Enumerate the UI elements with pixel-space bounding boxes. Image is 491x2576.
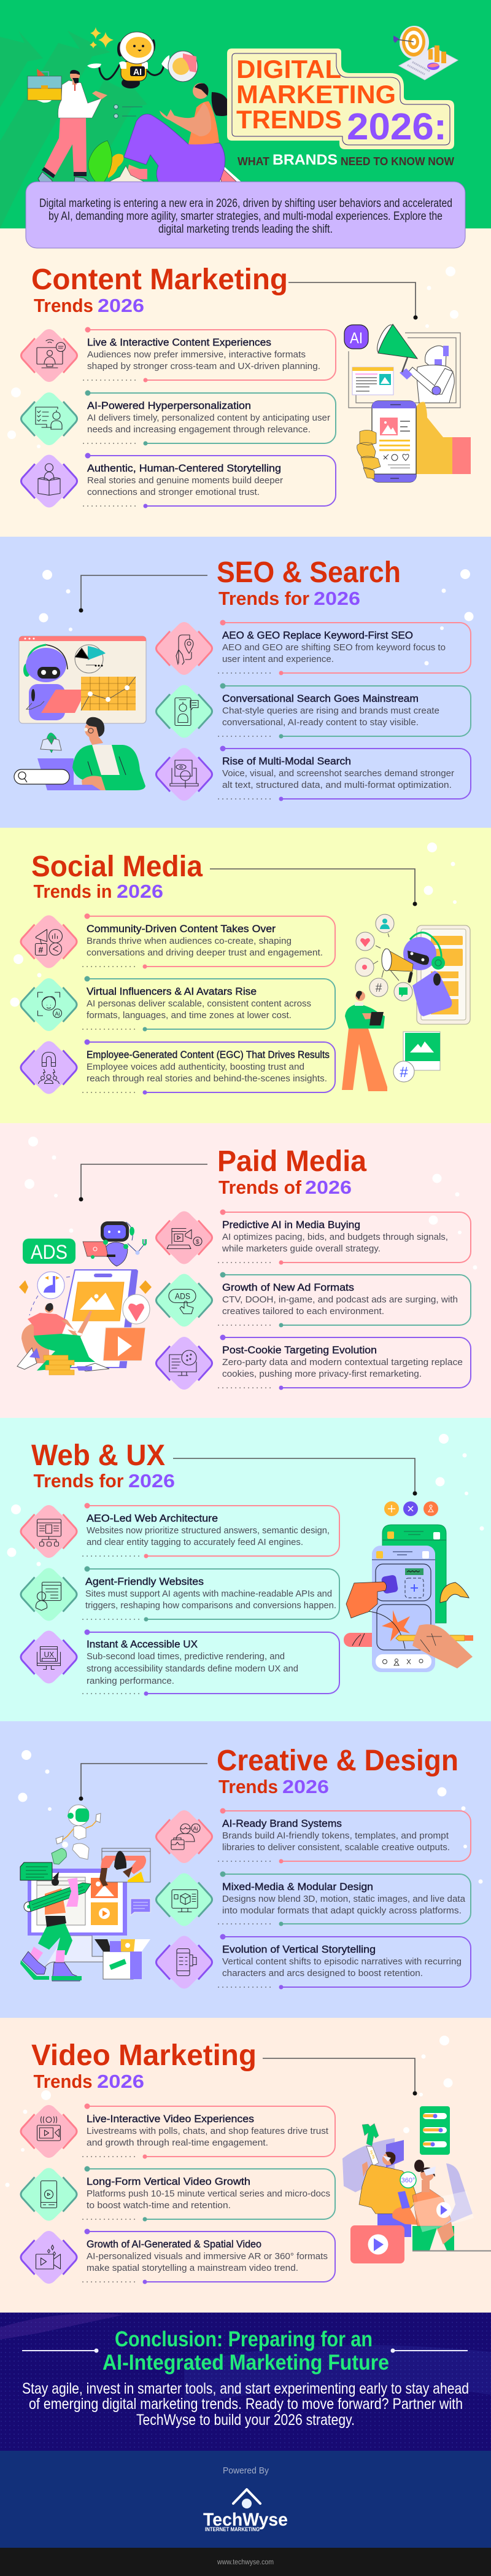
card 3: Evolution of Vertical Storytelling [222, 1944, 376, 1955]
card 3: Real stories and genuine moments build deeper [87, 476, 283, 486]
icon: laptop ad [156, 1211, 212, 1264]
panel: powered by [0, 2451, 491, 2548]
icon: AI avatar: Ai [55, 1011, 60, 1017]
card 1: Websites now prioritize structured answers, semantic design, [87, 1526, 330, 1536]
card 1: AEO & GEO Replace Keyword-First SEO [222, 630, 413, 641]
card 3: connections and stronger emotional trust. [87, 488, 260, 497]
conclusion body: TechWyse to build your 2026 strategy. [136, 2411, 355, 2429]
illustration: robot analytics and man [14, 636, 146, 790]
connector [288, 282, 417, 319]
panel: Video Marketing [0, 2018, 491, 2313]
connector [210, 869, 417, 906]
card 2: Designs now blend 3D, motion, static images, and live data [222, 1894, 466, 1904]
subtitle: BRANDS [273, 152, 338, 168]
figure: seated woman [101, 83, 247, 187]
card 1 [218, 1808, 471, 1863]
divider lines [22, 2348, 468, 2353]
icon: sparkles [90, 27, 114, 49]
illustration: VR shoppers: $ [370, 2150, 373, 2155]
connector [79, 575, 207, 613]
icon: laptop ad: $ [196, 1239, 199, 1245]
panel: hero header [0, 0, 491, 228]
card 1: user intent and experience. [222, 655, 334, 664]
card 2: AI personas deliver scalable, consistent content across [87, 999, 311, 1009]
panel: Content Marketing [0, 182, 491, 537]
card 3 [83, 2229, 335, 2284]
icon: UX screen [21, 1631, 77, 1684]
intro text box: digital marketing trends leading the shift. [158, 223, 333, 236]
subheading: 2026 [98, 295, 144, 316]
card 1: Audiences now prefer immersive, interactive formats [87, 350, 306, 360]
icon: AI robot: AI [133, 67, 142, 77]
background dots [10, 842, 457, 1007]
subheading: Trends in [33, 881, 112, 902]
card 1 [218, 1210, 471, 1265]
card 3: cookies, pushing more privacy-first remarketing. [222, 1369, 422, 1379]
card 2: triggers, reshaping how comparisons and conversions happen. [85, 1601, 336, 1611]
subheading: Trends for [218, 588, 309, 609]
subheading [33, 1470, 175, 1492]
heading: Social Media [31, 850, 203, 883]
icon: cookie monitor [156, 1337, 212, 1390]
card 2: Platforms push 10-15 minute vertical series and micro-docs [87, 2189, 330, 2199]
icon: live video camera [21, 2105, 77, 2158]
illustration: VR shoppers: $ [372, 2154, 375, 2160]
panel: Paid Media [0, 1123, 491, 1418]
card 3: ranking performance. [87, 1676, 174, 1686]
icon: community bubbles [21, 915, 77, 968]
connector [173, 1458, 417, 1496]
subheading [34, 295, 144, 316]
card 2: conversational, AI-ready content to stay visible. [222, 718, 419, 728]
card 3: Growth of AI-Generated & Spatial Video [87, 2239, 261, 2250]
card 3 [218, 1335, 471, 1390]
card 2 [83, 2166, 335, 2222]
title banner: TRENDS [236, 105, 342, 134]
subtitle [238, 152, 454, 168]
icon: UX screen: UX [44, 1651, 54, 1659]
card 1: Community-Driven Content Takes Over [87, 924, 276, 935]
background dots [25, 1137, 477, 1270]
subheading: Trends for [33, 1470, 124, 1492]
powered by label: Powered By [223, 2465, 269, 2476]
subheading: 2026 [282, 1776, 329, 1797]
subheading: Trends [34, 295, 93, 316]
card 2 [218, 1872, 471, 1926]
logo: TechWyse [203, 2489, 288, 2532]
card 1: libraries to deliver consistent, scalable creative outputs. [222, 1843, 450, 1853]
heading: SEO & Search [217, 556, 401, 589]
icon: agent website [21, 1568, 77, 1621]
card 1: AI-Ready Brand Systems [222, 1818, 342, 1829]
icon: AI video camera [21, 2231, 77, 2284]
illustration: robot with megaphone and phone: AI [350, 330, 363, 347]
illustration: ads robot and phone [17, 1221, 152, 1375]
card 1 [83, 2104, 335, 2159]
conclusion heading: AI-Integrated Marketing Future [102, 2351, 389, 2375]
panel: Web & UX [0, 1418, 491, 1721]
icon: ADS click: ADS [175, 1291, 190, 1301]
title banner [227, 49, 454, 149]
card 2: CTV, DOOH, in-game, and podcast ads are surging, with [222, 1295, 458, 1305]
logo: TechWyse: TechWyse [203, 2510, 288, 2530]
card 1: AEO-Led Web Architecture [87, 1513, 218, 1524]
card 3 [218, 1934, 471, 1990]
icon: AI brand person [156, 1810, 212, 1863]
figure: man with briefcase [28, 69, 107, 187]
card 1: AEO and GEO are shifting SEO from keyword focus to [222, 643, 446, 653]
card 3: Instant & Accessible UX [87, 1639, 198, 1650]
card 3: Voice, visual, and screenshot searches demand stronger [222, 769, 454, 779]
subheading: 2026 [314, 588, 360, 609]
card 3 [83, 1630, 339, 1696]
subheading: Trends [218, 1776, 278, 1797]
icon: live monitor [21, 329, 77, 382]
panel: Creative & Design [0, 1721, 491, 2018]
subtitle: NEED TO KNOW NOW [341, 155, 454, 168]
heading: Video Marketing [31, 2039, 257, 2072]
card 2: Conversational Search Goes Mainstream [222, 693, 419, 704]
title banner: MARKETING [236, 80, 396, 109]
card 1: AI optimizes pacing, bids, and budgets through signals, [222, 1232, 448, 1242]
card 2: Agent-Friendly Websites [85, 1576, 204, 1587]
subheading [33, 2071, 144, 2092]
illustration: VR shoppers: 360° [401, 2177, 415, 2184]
heading: Web & UX [31, 1439, 165, 1472]
card 3: Post-Cookie Targeting Evolution [222, 1345, 377, 1356]
icon: AI checklist [21, 392, 77, 445]
icon: 3D design monitor [156, 1873, 212, 1926]
card 2: Chat-style queries are rising and brands must create [222, 706, 439, 716]
card 3 [218, 745, 471, 801]
card 2 [83, 976, 335, 1032]
subheading: 2026 [305, 1177, 352, 1198]
subheading: 2026 [128, 1470, 175, 1492]
conclusion heading [102, 2327, 389, 2375]
card 1: Brands build AI-friendly tokens, templates, and prompt [222, 1831, 449, 1841]
illustration: robot megaphone and social icons [342, 914, 470, 1091]
card 3: alt text, structured data, and multi-format optimization. [222, 780, 452, 790]
subheading: Trends [33, 2071, 92, 2092]
conclusion heading: Conclusion: Preparing for an [115, 2327, 373, 2351]
card 3: strong accessibility standards define modern UX and [87, 1664, 298, 1674]
subheading: 2026 [97, 2071, 144, 2092]
icon: AI robot [87, 32, 198, 88]
background dots [5, 2036, 453, 2187]
background dots [7, 1434, 484, 1566]
card 2 [83, 391, 336, 446]
card 2: to boost watch-time and retention. [87, 2201, 231, 2211]
icon: visual search [156, 748, 212, 801]
card 2: needs and increasing engagement through relevance. [87, 425, 311, 435]
card 1: Live & Interactive Content Experiences [87, 337, 271, 348]
subtitle: WHAT [238, 155, 269, 168]
icon: storyteller with book [21, 454, 77, 507]
title banner: 2026: [347, 106, 447, 147]
icon: phone location [156, 622, 212, 675]
card 1: Predictive AI in Media Buying [222, 1220, 360, 1231]
card 1: Livestreams with polls, chats, and shop features drive trust [87, 2127, 328, 2136]
icon: community bubbles: # [38, 944, 43, 954]
card 2: formats, languages, and time zones at lower cost. [87, 1011, 292, 1021]
card 3 [83, 1039, 335, 1094]
card 2: Mixed-Media & Modular Design [222, 1881, 373, 1893]
heading: Content Marketing [31, 263, 288, 296]
illustration: app design phones [344, 1501, 473, 1672]
background dots [39, 569, 474, 666]
subheading: Trends of [218, 1177, 302, 1198]
card 1: shaped by stronger cross-team and UX-driven planning. [87, 362, 320, 372]
illustration: robot megaphone and social icons: # [376, 982, 382, 995]
card 1: conversations and driving deeper trust and engagement. [87, 948, 323, 958]
card 3: Authentic, Human-Centered Storytelling [87, 463, 281, 474]
card 2: Virtual Influencers & AI Avatars Rise [87, 986, 257, 997]
card 1: and growth through real-time engagement. [87, 2138, 268, 2148]
conclusion body [22, 2380, 469, 2429]
icon: speed dots [114, 104, 142, 118]
illustration: ads robot and phone: ADS [31, 1241, 68, 1263]
card 3: make spatial storytelling a mainstream video trend. [87, 2263, 298, 2273]
card 2 [218, 683, 471, 738]
card 3: Sub-second load times, predictive rendering, and [87, 1652, 285, 1662]
background dots [18, 1750, 482, 1884]
card 1 [218, 620, 471, 675]
card 3: Employee voices add authenticity, boosting trust and [87, 1062, 304, 1072]
card 2 [83, 1566, 339, 1621]
intro text box [26, 182, 465, 248]
card 1: Brands thrive when audiences co-create, shaping [87, 936, 292, 946]
card 3: reach through real stories and behind-the-scenes insights. [87, 1074, 327, 1084]
icon: plant leaves [88, 141, 123, 187]
illustration: VR shoppers [342, 2106, 491, 2263]
icon: ADS click [156, 1274, 212, 1326]
logo: TechWyse: INTERNET MARKETING [205, 2526, 260, 2532]
card 3: Zero-party data and modern contextual targeting replace [222, 1358, 463, 1368]
icon: target and report [393, 26, 458, 80]
icon: vertical story phone [156, 1936, 212, 1988]
illustration: robot with megaphone and phone [344, 323, 471, 482]
card 2: creatives tailored to each environment. [222, 1307, 384, 1317]
card 3: AI-personalized visuals and immersive AR or 360° formats [87, 2252, 328, 2262]
icon: AI avatar [21, 978, 77, 1031]
heading: Creative & Design [217, 1745, 458, 1777]
card 3 [83, 453, 336, 508]
card 3: Vertical content shifts to episodic narratives with recurring [222, 1957, 462, 1967]
card 3: Rise of Multi-Modal Search [222, 756, 351, 767]
subheading: 2026 [117, 881, 163, 902]
subheading [33, 881, 163, 902]
card 2: AI delivers timely, personalized content by anticipating user [87, 413, 330, 423]
illustration: robot megaphone and social icons: # [400, 1064, 408, 1081]
panel: Social Media [0, 828, 491, 1123]
card 2: Sites must support AI agents with machine-readable APIs and [85, 1589, 332, 1599]
card 1 [83, 914, 335, 969]
card 2 [218, 1272, 471, 1328]
icon: magnet attracting people [21, 1041, 77, 1094]
card 3: Employee-Generated Content (EGC) That Drives Results [87, 1049, 330, 1060]
icon: site architecture [21, 1505, 77, 1558]
panel: SEO & Search [0, 537, 491, 828]
icon: vertical video phone [21, 2168, 77, 2220]
illustration: designer and monitor [20, 1805, 150, 1981]
card 1: Live-Interactive Video Experiences [87, 2114, 254, 2125]
subheading [218, 1776, 329, 1797]
title banner: DIGITAL [236, 55, 341, 84]
icon: AI brand person: Ai [193, 1826, 198, 1832]
subheading [218, 1177, 352, 1198]
connector [79, 1164, 207, 1201]
card 2: into modular formats that adapt quickly across platforms. [222, 1906, 462, 1916]
card 1 [83, 327, 336, 382]
footer: www.techwyse.com [217, 2558, 274, 2566]
connector [79, 1764, 207, 1800]
icon: phone chatbot [156, 685, 212, 738]
card 2: Growth of New Ad Formats [222, 1282, 354, 1293]
connector [263, 2058, 417, 2095]
heading: Paid Media [217, 1145, 366, 1178]
footer [0, 2548, 491, 2576]
card 2: Long-Form Vertical Video Growth [87, 2176, 250, 2187]
card 1 [83, 1503, 339, 1558]
card 2: AI-Powered Hyperpersonalization [87, 400, 251, 411]
panel: conclusion [0, 2313, 491, 2451]
subheading [218, 588, 360, 609]
background dots [7, 267, 458, 448]
card 3: characters and arcs designed to boost retention. [222, 1969, 423, 1979]
card 1: and clear entity tagging to accurately feed AI engines. [87, 1538, 303, 1547]
card 1: while marketers guide overall strategy. [222, 1244, 381, 1254]
